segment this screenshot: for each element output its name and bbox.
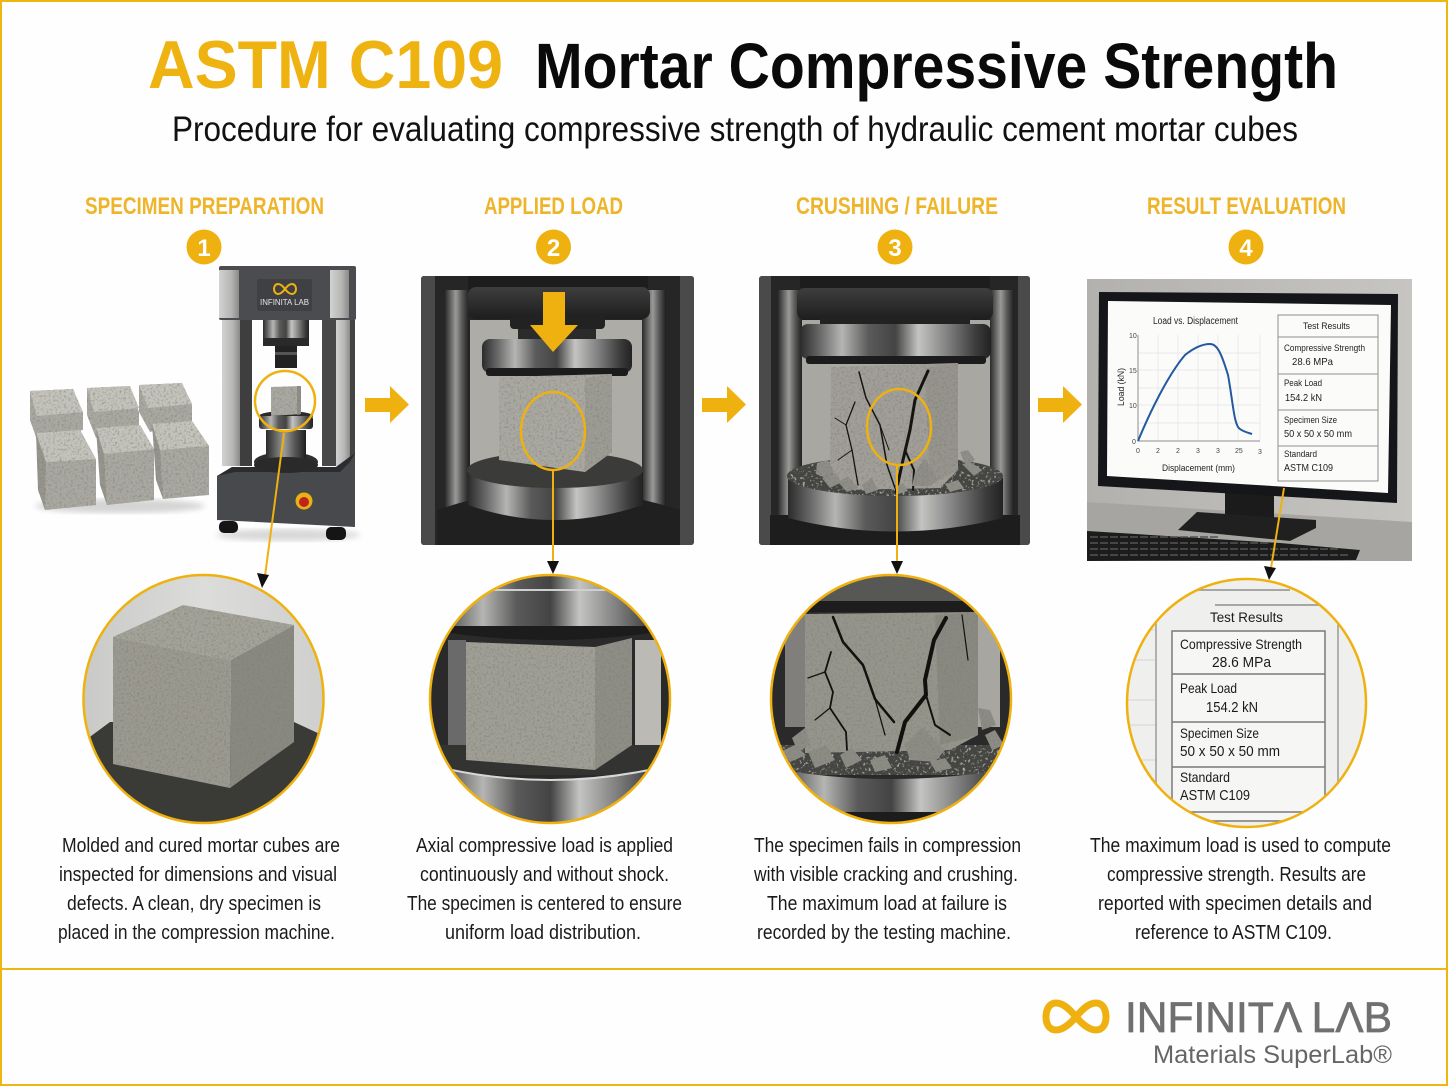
crosshead <box>797 276 993 326</box>
load displacement chart: Load vs. Displacement <box>1153 316 1238 327</box>
compression machine <box>216 266 360 541</box>
zoom circle 4: test results: Specimen Size <box>1180 725 1259 741</box>
step 1 heading: SPECIMEN PREPARATION <box>85 193 324 220</box>
step 3 heading: CRUSHING / FAILURE <box>796 193 998 220</box>
connector: step 1 callout <box>257 433 284 588</box>
load displacement chart: 0 <box>1132 439 1136 446</box>
cracks <box>808 615 968 752</box>
description: step 1 <box>58 835 340 944</box>
load displacement chart: Displacement (mm) <box>1162 463 1235 474</box>
connector: step 4 callout <box>1264 488 1284 580</box>
photo panel: results monitor <box>1087 279 1412 561</box>
load displacement chart <box>1116 316 1262 474</box>
test results table: ASTM C109 <box>1284 462 1333 474</box>
description: step 2: continuously and without shock. <box>420 864 669 886</box>
zoom circle 2: cube under load <box>430 575 671 823</box>
test results table <box>1278 315 1378 481</box>
small focus circle on machine <box>255 371 315 431</box>
load displacement chart: 3 <box>1196 448 1200 455</box>
photo panel: crushing <box>759 276 1030 545</box>
description: step 1: placed in the compression machine. <box>58 922 335 944</box>
load displacement chart: 10 <box>1129 403 1137 410</box>
step 1 heading: 1 <box>197 235 211 262</box>
zoom circle 4: test results: 50 x 50 x 50 mm <box>1180 744 1280 760</box>
test results table: 154.2 kN <box>1285 392 1322 404</box>
mortar cube group <box>30 383 209 513</box>
step 4 heading <box>1147 193 1346 264</box>
load displacement chart: 25 <box>1235 448 1243 455</box>
zoom circle 4: test results: 28.6 MPa <box>1212 655 1272 671</box>
step 3 heading: 3 <box>888 235 902 262</box>
rubble <box>780 708 1004 772</box>
monitor stand <box>1178 490 1316 541</box>
crosshead <box>468 276 650 343</box>
arrow: step 3 to 4 <box>1038 386 1082 423</box>
description: step 4: reported with specimen details and <box>1098 893 1372 915</box>
description: step 3: with visible cracking and crushing. <box>753 864 1018 886</box>
description: step 1: defects. A clean, dry specimen is <box>67 893 321 915</box>
description: step 1: inspected for dimensions and visual <box>59 864 337 886</box>
subtitle: Procedure for evaluating compressive strength of hydraulic cement mortar cubes <box>172 110 1298 149</box>
keyboard <box>1087 531 1360 561</box>
step 2 heading: 2 <box>547 235 560 262</box>
zoom circle 4: test results: Standard <box>1180 769 1230 785</box>
footer logo <box>1046 994 1393 1069</box>
rubble <box>816 450 982 494</box>
test results table: Standard <box>1284 449 1317 460</box>
title: Mortar Compressive Strength <box>535 30 1338 102</box>
machine head with logo <box>219 266 356 320</box>
title <box>148 27 1338 103</box>
description: step 2: The specimen is centered to ensure <box>407 893 682 915</box>
focus circle <box>867 389 931 465</box>
focus circle <box>521 392 585 470</box>
test results table: Test Results <box>1303 321 1350 332</box>
test results table: Specimen Size <box>1284 415 1337 426</box>
step 1 heading <box>85 193 324 264</box>
description: step 4: The maximum load is used to compute <box>1090 835 1391 857</box>
footer logo: Materials SuperLab® <box>1153 1041 1393 1069</box>
zoom circle 4: test results: Peak Load <box>1180 680 1237 696</box>
machine base <box>217 453 355 540</box>
machine columns <box>222 320 355 466</box>
description: step 2: Axial compressive load is applied <box>416 835 673 857</box>
description: step 3: The specimen fails in compression <box>754 835 1021 857</box>
upper platen <box>800 324 991 364</box>
footer divider <box>0 968 1448 970</box>
test results table: Peak Load <box>1284 378 1322 389</box>
connector: step 3 callout <box>891 465 903 574</box>
description: step 1: Molded and cured mortar cubes are <box>62 835 340 857</box>
zoom circle 4: test results: 154.2 kN <box>1206 700 1258 716</box>
emergency stop button <box>296 492 312 510</box>
description: step 3: recorded by the testing machine. <box>757 922 1011 944</box>
zoom circle 4: test results: Compressive Strength <box>1180 636 1302 652</box>
lower platen <box>445 456 665 520</box>
description: step 4: compressive strength. Results are <box>1107 864 1366 886</box>
machine head with logo: INFINITA LAB <box>260 298 309 307</box>
description: step 2 <box>407 835 682 944</box>
zoom circle 4: test results: Test Results <box>1210 609 1283 625</box>
description: step 3 <box>753 835 1021 944</box>
step 2 heading <box>484 193 623 264</box>
arrow: step 2 to 3 <box>702 386 746 423</box>
step 3 heading <box>796 193 998 264</box>
load displacement chart: 2 <box>1176 448 1180 455</box>
step 4 heading: RESULT EVALUATION <box>1147 193 1346 220</box>
upper platen <box>482 339 632 376</box>
load displacement chart: 10 <box>1129 333 1137 340</box>
load displacement chart: Load (kN) <box>1116 368 1126 406</box>
lower platen and small cube <box>254 386 318 472</box>
icon: infinity <box>1046 1003 1106 1030</box>
lower platen <box>770 456 1020 545</box>
connector: step 2 callout <box>547 470 559 574</box>
concrete cube <box>499 374 612 472</box>
load displacement chart: 2 <box>1156 448 1160 455</box>
zoom circle 1: cube on platen <box>83 575 324 823</box>
load displacement chart: 15 <box>1129 368 1137 375</box>
step 2 heading: APPLIED LOAD <box>484 193 623 220</box>
monitor screen <box>1107 301 1391 493</box>
step 4 heading: 4 <box>1239 235 1253 262</box>
upper ram <box>263 320 309 368</box>
monitor bezel <box>1098 292 1398 503</box>
test results table: 50 x 50 x 50 mm <box>1284 428 1352 440</box>
cracks <box>835 371 928 492</box>
footer logo: INFINITΛ LΛB <box>1125 994 1392 1042</box>
photo panel: applied load <box>421 276 694 545</box>
load displacement chart: 3 <box>1258 449 1262 456</box>
test results table: Compressive Strength <box>1284 343 1365 354</box>
zoom circle 4: test results: ASTM C109 <box>1180 788 1250 804</box>
description: step 3: The maximum load at failure is <box>767 893 1007 915</box>
zoom circle 4: test results <box>1127 579 1367 827</box>
description: step 2: uniform load distribution. <box>445 922 641 944</box>
load displacement chart: 3 <box>1216 448 1220 455</box>
test results table: 28.6 MPa <box>1292 356 1333 368</box>
description: step 4: reference to ASTM C109. <box>1135 922 1332 944</box>
arrow: step 1 to 2 <box>365 386 409 423</box>
zoom circle 3: crushed specimen <box>771 575 1012 824</box>
load arrow <box>530 292 578 352</box>
title: ASTM C109 <box>148 27 503 103</box>
description: step 4 <box>1090 835 1391 944</box>
load displacement chart: 0 <box>1136 448 1140 455</box>
cracked cube <box>830 363 958 490</box>
